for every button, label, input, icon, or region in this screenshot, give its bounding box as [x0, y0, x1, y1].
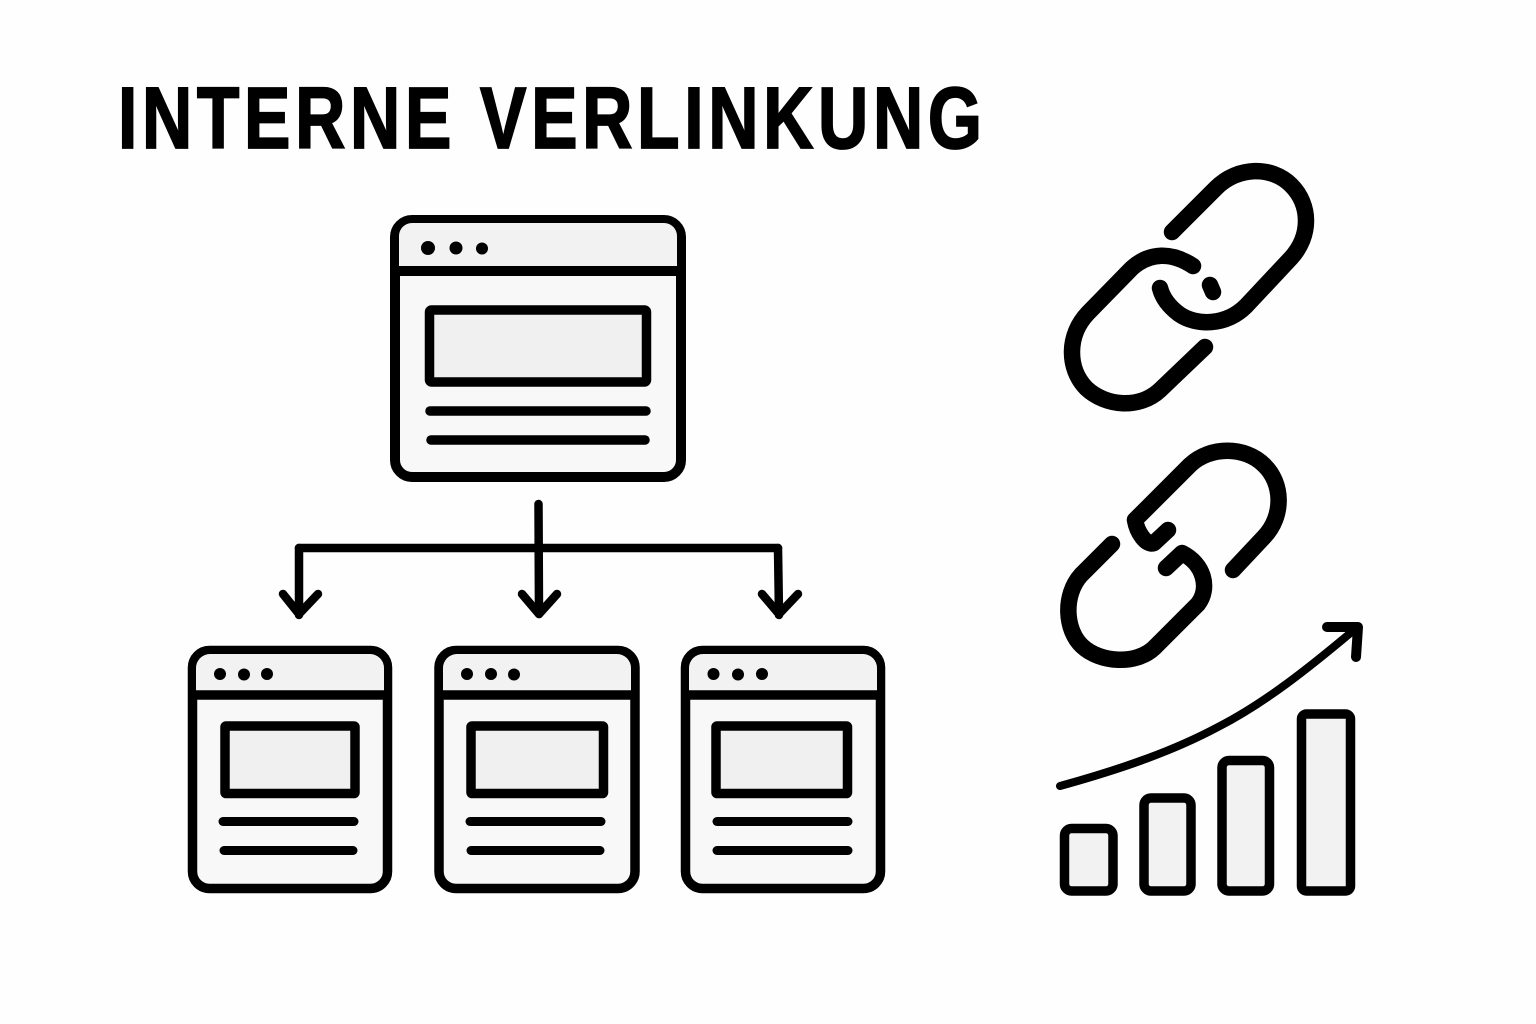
arrow head — [1327, 627, 1358, 657]
left arrow — [283, 548, 318, 615]
text lines — [223, 822, 354, 850]
title bar divider — [438, 690, 636, 700]
bar 1 — [1064, 828, 1113, 891]
panel: child page window 3 — [685, 650, 881, 888]
arrow: rising trend — [1060, 627, 1358, 786]
bar chart: growth — [1064, 714, 1350, 891]
image placeholder — [471, 726, 604, 794]
window dots — [421, 241, 488, 255]
stem and horizontal branch — [299, 504, 778, 614]
trend curve — [1060, 630, 1354, 786]
window frame — [395, 220, 681, 477]
image placeholder — [225, 726, 355, 794]
window dots — [461, 668, 520, 680]
bar 4 — [1302, 714, 1350, 891]
icon: intact chain link — [1072, 171, 1306, 403]
panel: child page window 2 — [438, 650, 636, 888]
title bar divider — [192, 690, 388, 700]
upper link — [1160, 171, 1306, 322]
lower link piece — [1068, 544, 1204, 660]
text lines — [430, 411, 646, 440]
bar 2 — [1144, 798, 1191, 891]
panel: main page window — [395, 220, 681, 477]
bar 3 — [1222, 760, 1270, 891]
window dots — [214, 668, 273, 680]
upper link piece — [1135, 451, 1279, 570]
text lines — [470, 822, 601, 850]
text lines — [717, 822, 848, 850]
lower link — [1072, 256, 1205, 403]
title: INTERNE VERLINKUNG — [118, 70, 982, 167]
icon: broken chain link — [1068, 451, 1279, 660]
title bar divider — [685, 690, 881, 700]
image placeholder — [716, 726, 848, 794]
window dots — [708, 668, 768, 680]
title bar divider — [395, 266, 681, 276]
panel: child page window 1 — [192, 650, 388, 888]
link fragment — [1210, 285, 1213, 292]
window frame — [439, 650, 635, 888]
window title bar — [689, 654, 877, 693]
window title bar — [443, 654, 631, 693]
window title bar — [399, 223, 677, 271]
image placeholder — [430, 310, 646, 382]
window title bar — [196, 654, 384, 693]
right arrow — [762, 548, 798, 615]
arrows: hierarchy connector — [283, 504, 798, 615]
middle arrow — [522, 594, 557, 614]
window frame — [686, 650, 880, 888]
window frame — [192, 650, 388, 888]
